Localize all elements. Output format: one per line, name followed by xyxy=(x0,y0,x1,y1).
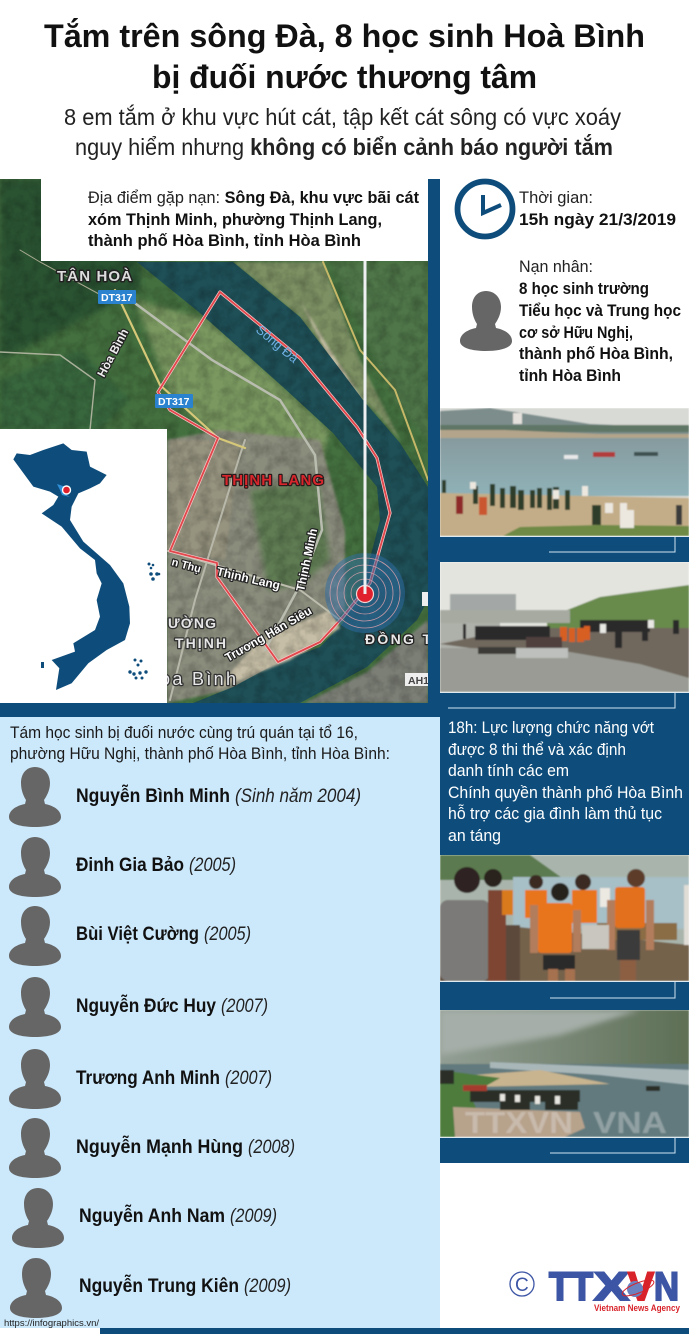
panel: timeline text: được 8 thi thể và xác định xyxy=(448,740,626,759)
photo 2: boats and crowd xyxy=(440,562,689,692)
watermark: VNA xyxy=(593,1105,667,1140)
victim names: Nguyễn Đức Huy xyxy=(76,995,216,1017)
red ward boundary xyxy=(158,292,390,662)
map labels xyxy=(57,267,431,689)
intro text xyxy=(10,723,390,763)
location info box: thành phố Hòa Bình, tỉnh Hòa Bình xyxy=(88,232,361,250)
subtitle: nguy hiểm nhưng không có biển cảnh báo người tắm xyxy=(75,133,613,160)
photo 3: rescuers in orange vests xyxy=(440,855,689,981)
victim names: Bùi Việt Cường xyxy=(76,924,199,945)
victim names: (2009) xyxy=(244,1276,291,1297)
location info box: xóm Thịnh Minh, phường Thịnh Lang, xyxy=(88,211,382,229)
title xyxy=(44,18,645,95)
band with bracket 1 xyxy=(440,536,689,562)
band with bracket 2 xyxy=(440,981,689,1010)
victim names: Đinh Gia Bảo xyxy=(76,855,184,876)
location marker xyxy=(325,261,405,633)
map labels: DT317 xyxy=(101,292,133,304)
map labels: Sông Đà xyxy=(253,322,302,366)
logo: TTXVN: C xyxy=(515,1275,529,1296)
subtitle: 8 em tắm ở khu vực hút cát, tập kết cát sông có vực xoáy xyxy=(64,104,621,130)
victim summary text: Nạn nhân: xyxy=(519,257,593,276)
victim names: Nguyễn Anh Nam xyxy=(79,1205,225,1227)
victim summary text: 8 học sinh trường xyxy=(519,279,649,298)
map labels: THỊNH xyxy=(175,635,226,651)
victim summary text xyxy=(519,257,681,385)
victim summary text: cơ sở Hữu Nghị, xyxy=(519,323,633,342)
map labels: ƯỜNG xyxy=(168,614,216,631)
map labels: THỊNH LANG xyxy=(222,472,324,489)
victim names: Nguyễn Trung Kiên xyxy=(79,1275,239,1297)
icon: clock xyxy=(458,182,512,236)
photo 1: rescue scene on river bank xyxy=(440,408,689,536)
map labels: n Thụ xyxy=(170,556,202,576)
victim names: (2005) xyxy=(189,855,236,876)
logo: TTXVN xyxy=(510,1265,681,1314)
icon: victim person xyxy=(460,291,512,351)
victim names: (Sinh năm 2004) xyxy=(235,786,361,807)
intro text: phường Hữu Nghị, thành phố Hòa Bình, tỉnh Hòa Bình: xyxy=(10,744,390,763)
bottom bar xyxy=(100,1328,689,1334)
time text xyxy=(519,188,676,229)
time text: Thời gian: xyxy=(519,188,593,207)
footer source url: https://infographics.vn/ xyxy=(4,1318,99,1329)
victim names: (2005) xyxy=(204,924,251,945)
logo: TTXVN: V xyxy=(628,1265,654,1309)
time text: 15h ngày 21/3/2019 xyxy=(519,210,676,229)
map labels: DT317 xyxy=(158,396,190,408)
blue frame: divider bars xyxy=(0,179,440,717)
victim names: (2007) xyxy=(225,1068,272,1089)
panel: timeline text xyxy=(440,692,689,855)
map labels: oa Bình xyxy=(160,669,236,689)
map labels: AH1 xyxy=(408,675,429,687)
intro text: Tám học sinh bị đuối nước cùng trú quán tại tổ 16, xyxy=(10,723,358,742)
river xyxy=(137,262,428,703)
logo: TTXVN: TT xyxy=(549,1265,593,1309)
logo: TTXVN: N xyxy=(654,1265,679,1309)
roads xyxy=(0,250,428,700)
victim names: Nguyễn Mạnh Hùng xyxy=(76,1136,243,1158)
logo: TTXVN: X xyxy=(594,1265,629,1309)
location info box: Địa điểm gặp nạn: Sông Đà, khu vực bãi cát xyxy=(88,189,419,207)
band with bracket 3 xyxy=(440,1137,689,1163)
victim icons xyxy=(9,767,64,1318)
victim names: Trương Anh Minh xyxy=(76,1068,220,1089)
victim names: (2009) xyxy=(230,1206,277,1227)
map labels: Thịnh Lang xyxy=(215,564,281,592)
title: bị đuối nước thương tâm xyxy=(152,59,537,95)
victim names: Nguyễn Bình Minh xyxy=(76,785,230,807)
photo 4: crowd along the river xyxy=(440,1010,689,1140)
map labels: Trương Hán Siêu xyxy=(222,604,314,665)
watermark: TTXVN xyxy=(465,1105,573,1140)
map labels: Hòa Bình xyxy=(94,326,131,379)
watermark xyxy=(465,1112,666,1134)
panel: timeline text: hỗ trợ các gia đình làm thủ tục xyxy=(448,804,662,823)
map labels: ĐỒNG T xyxy=(365,630,431,647)
victim names: (2007) xyxy=(221,996,268,1017)
panel: timeline text: an táng xyxy=(448,826,501,845)
title: Tắm trên sông Đà, 8 học sinh Hoà Bình xyxy=(44,18,645,54)
victim names: (2008) xyxy=(248,1137,295,1158)
victim summary text: tỉnh Hòa Bình xyxy=(519,366,621,385)
map labels: TÂN HOÀ xyxy=(57,267,132,285)
subtitle xyxy=(64,104,621,160)
map labels: Thịnh Minh xyxy=(293,527,320,593)
panel: satellite map xyxy=(0,179,431,703)
victim summary text: thành phố Hòa Bình, xyxy=(519,344,673,363)
inset: Vietnam map xyxy=(0,429,167,703)
victim names xyxy=(76,785,361,1297)
panel: timeline text: danh tính các em xyxy=(448,761,569,780)
location info box xyxy=(41,179,428,261)
panel: timeline text: 18h: Lực lượng chức năng vớt xyxy=(448,718,654,737)
panel: list of victims xyxy=(0,717,440,1328)
